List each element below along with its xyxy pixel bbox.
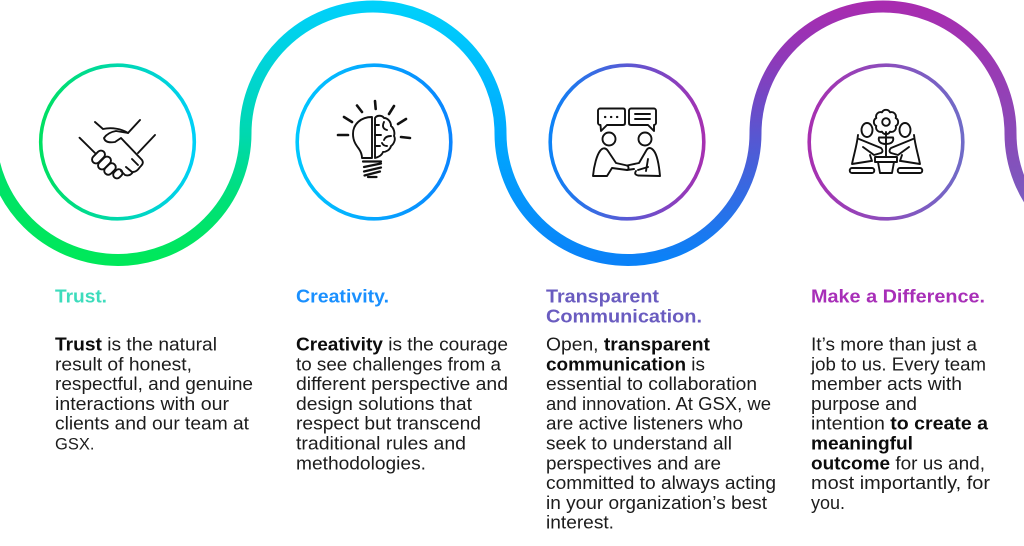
text: communication body: committed to always acting — [546, 473, 776, 493]
text: trust body: GSX. — [55, 436, 94, 454]
heading: trust: Trust. — [55, 286, 107, 306]
text: trust body: respectful, and genuine — [55, 374, 253, 394]
text: trust body — [55, 334, 253, 454]
panel: make a difference — [809, 65, 990, 513]
text: trust body: Trust is the natural — [55, 334, 217, 354]
text: creativity body: design solutions that — [296, 394, 472, 414]
text: make a difference body: purpose and — [811, 394, 917, 414]
text: creativity body: respect but transcend — [296, 414, 481, 434]
heading: make a difference: Make a Difference. — [811, 286, 985, 306]
text: trust body: interactions with our — [55, 394, 229, 414]
icon: people growing a flower — [850, 110, 922, 173]
text: make a difference body: meaningful — [811, 434, 913, 454]
heading: transparent communication — [546, 286, 702, 326]
text: communication body: interest. — [546, 513, 614, 533]
ring: make a difference — [809, 65, 963, 219]
text: communication body: communication is — [546, 354, 705, 374]
text: communication body: seek to understand all — [546, 434, 732, 454]
text: creativity body — [296, 334, 508, 473]
heading: transparent communication: Communication. — [546, 306, 702, 326]
text: communication body — [546, 334, 776, 533]
text: communication body: in your organization’s best — [546, 493, 767, 513]
text: trust body: clients and our team at — [55, 414, 249, 434]
text: communication body: essential to collaboration — [546, 374, 757, 394]
text: make a difference body: you. — [811, 493, 845, 513]
text: creativity body: different perspective and — [296, 374, 508, 394]
icon: handshake — [80, 120, 155, 180]
ring: communication — [550, 65, 704, 219]
text: communication body: and innovation. At GSX, we — [546, 394, 771, 414]
text: communication body: are active listeners who — [546, 414, 743, 434]
text: communication body: perspectives and are — [546, 453, 721, 473]
text: make a difference body — [810, 334, 990, 513]
icon: two people talking — [593, 108, 660, 176]
text: make a difference body: outcome for us and, — [811, 453, 985, 473]
text: trust body: result of honest, — [55, 354, 192, 374]
heading: creativity: Creativity. — [296, 286, 389, 306]
text: make a difference body: most importantly, for — [811, 473, 990, 493]
text: make a difference body: job to us. Every team — [810, 354, 986, 374]
heading: transparent communication: Transparent — [546, 286, 659, 306]
text: make a difference body: intention to create a — [811, 414, 989, 434]
text: creativity body: to see challenges from a — [296, 354, 502, 374]
text: make a difference body: It’s more than just a — [811, 334, 978, 354]
panel: transparent communication — [546, 65, 776, 533]
ring: trust — [41, 65, 194, 219]
panel: creativity — [296, 65, 508, 473]
text: make a difference body: member acts with — [811, 374, 962, 394]
icon: light bulb with brain — [338, 101, 410, 177]
panel: trust — [41, 65, 253, 453]
text: creativity body: traditional rules and — [296, 434, 466, 454]
ring: creativity — [297, 65, 451, 219]
text: creativity body: methodologies. — [296, 453, 426, 473]
text: communication body: Open, transparent — [546, 334, 710, 354]
text: creativity body: Creativity is the courage — [296, 334, 508, 354]
wavy gradient ribbon — [0, 6, 1024, 260]
